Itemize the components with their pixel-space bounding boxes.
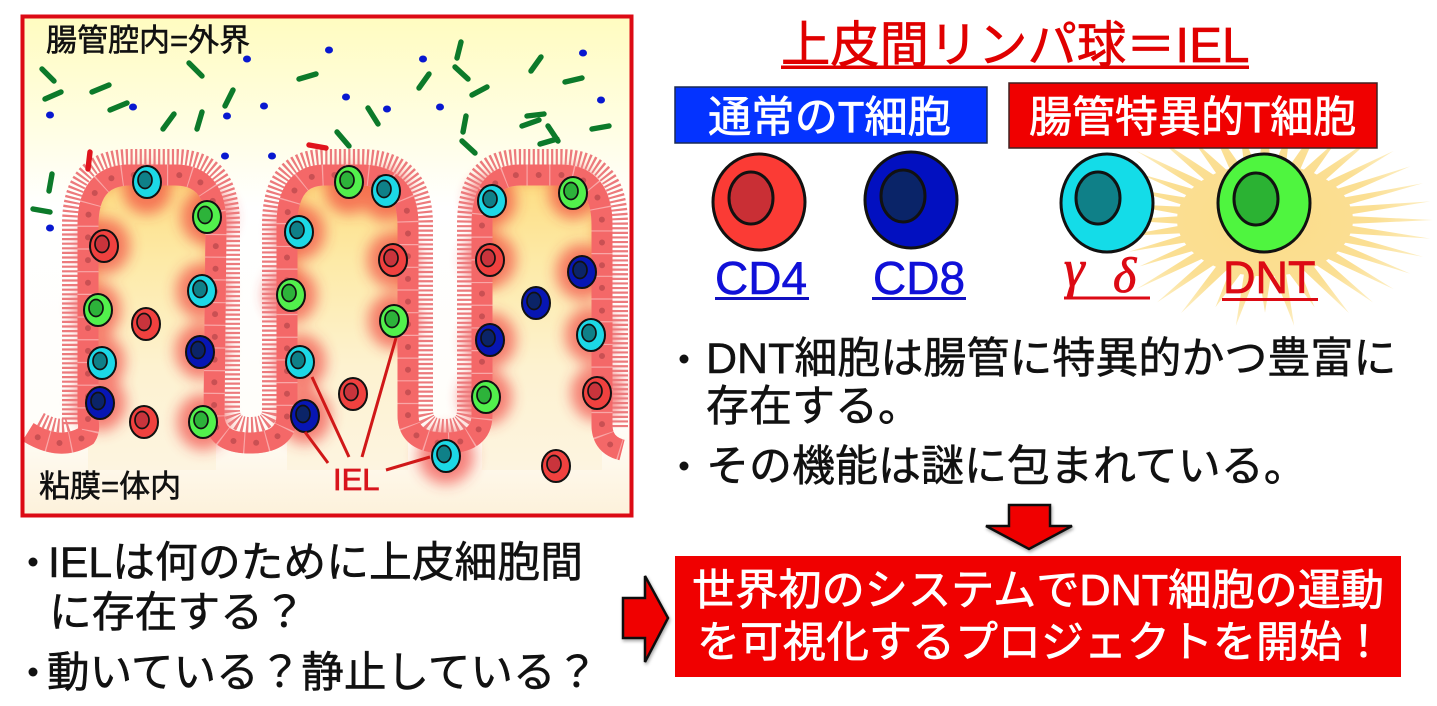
lumen label: 腸管腔内=外界	[46, 23, 250, 58]
heading: normal T cells: 通常のT細胞	[708, 94, 951, 142]
heading: normal T cells	[675, 87, 987, 143]
conclusion box: を可視化するプロジェクトを開始！	[697, 619, 1385, 667]
left question 1: に存在する？	[49, 589, 306, 637]
bullet: DNT abundance	[680, 335, 1396, 431]
green cells	[84, 166, 587, 438]
conclusion box: 世界初のシステムでDNT細胞の運動	[692, 567, 1384, 615]
green bacteria	[33, 42, 609, 212]
title: 上皮間リンパ球＝IEL	[781, 18, 1249, 73]
cell: CD8	[865, 152, 957, 248]
IEL label: IEL	[333, 462, 380, 497]
cyan cells	[88, 166, 605, 472]
left question 1: IELは何のために上皮細胞間	[48, 539, 583, 587]
heading: gut-specific T cells: 腸管特異的T細胞	[1029, 94, 1356, 142]
blue dots	[46, 46, 605, 232]
panel border	[22, 16, 632, 516]
bullet: DNT abundance: DNT細胞は腸管に特異的かつ豊富に	[706, 335, 1396, 383]
label: gamma delta: γ	[1064, 241, 1086, 298]
label: CD4: CD4	[715, 252, 807, 304]
left question 1	[28, 539, 583, 637]
mucosa label: 粘膜=体内	[39, 469, 181, 504]
navy cells	[86, 256, 596, 432]
bullet: DNT abundance: 存在する。	[706, 383, 921, 431]
left question 2: 動いている？静止している？	[47, 649, 598, 697]
label: gamma delta	[1064, 241, 1150, 303]
cell: CD4	[713, 154, 805, 250]
sunburst	[1120, 112, 1433, 327]
IEL leader lines	[305, 338, 430, 470]
conclusion box	[675, 556, 1401, 677]
heading: gut-specific T cells	[1009, 83, 1377, 148]
villus tissue	[28, 157, 623, 484]
arrow: down	[986, 505, 1072, 549]
cell: gamma delta	[1061, 154, 1153, 252]
label: CD8: CD8	[873, 252, 965, 304]
arrow: right	[623, 576, 668, 662]
red bacteria	[88, 145, 326, 169]
bullet: function unknown: その機能は謎に包まれている。	[706, 443, 1307, 491]
cell: DNT	[1218, 154, 1310, 252]
panel: intestine diagram	[21, 15, 633, 517]
label: DNT: DNT	[1223, 252, 1315, 303]
label: gamma delta: δ	[1113, 247, 1137, 303]
red cells	[90, 230, 611, 482]
